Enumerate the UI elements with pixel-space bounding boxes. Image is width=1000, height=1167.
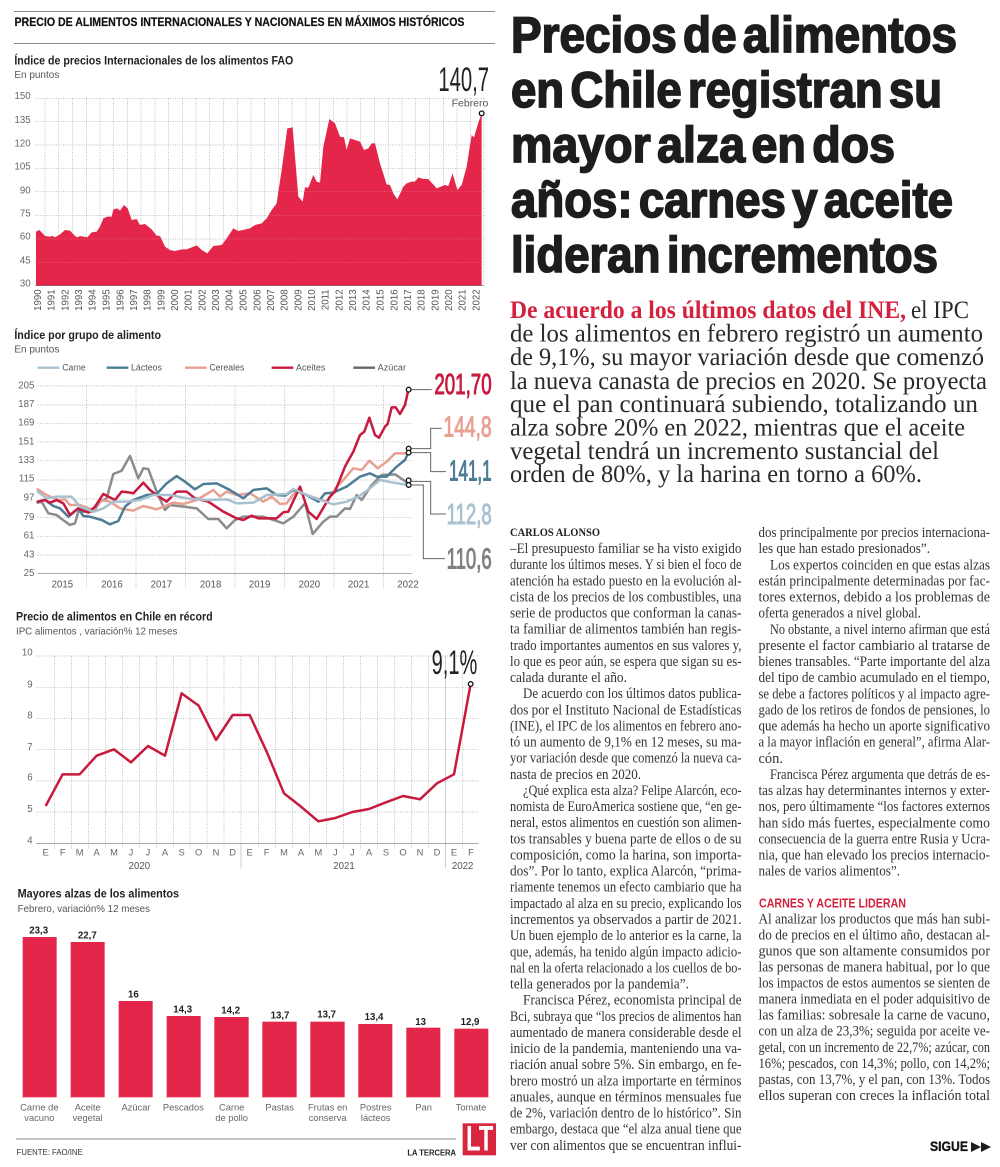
x axis year labels [33, 289, 482, 311]
article body: left column: composición, como la harina, son importa- [510, 848, 742, 864]
month labels: E [43, 848, 49, 858]
article body: final section: las familias: sobresale la carne de vacuno, [758, 1008, 990, 1024]
y axis labels: 105 [15, 161, 31, 172]
legend: Lácteos [131, 363, 162, 373]
chart unit: En puntos [14, 70, 59, 81]
article body: final section [758, 911, 991, 1104]
end values [434, 369, 492, 575]
y axis labels: 6 [27, 773, 33, 784]
legend: Aceites [296, 363, 326, 373]
article body: left column: De acuerdo con los últimos datos publica- [523, 686, 742, 702]
y axis labels: 8 [27, 710, 33, 721]
month labels: N [213, 848, 219, 858]
line: IPC alimentos [46, 684, 471, 821]
y axis labels: 43 [24, 549, 34, 560]
legend: Azúcar [378, 363, 406, 373]
x axis year labels: 2016 [101, 580, 123, 591]
month labels: M [280, 848, 288, 858]
bar category labels: Carne [219, 1102, 244, 1112]
y axis labels: 115 [19, 474, 34, 485]
y axis labels: 150 [15, 91, 31, 102]
x axis year labels: 2004 [225, 289, 236, 311]
y axis labels: 10 [22, 648, 33, 659]
article body: right column: cón. [758, 751, 783, 767]
x axis year labels: 1996 [115, 289, 126, 311]
bars [23, 937, 488, 1097]
deck paragraph: de 9,1%, su mayor variación desde que comenzó [510, 344, 984, 371]
article body: right column: nales de varios alimentos”. [758, 864, 900, 880]
x axis year labels: 1994 [88, 289, 99, 311]
x axis year labels: 2013 [348, 289, 359, 311]
logo: LT: LT [466, 1120, 493, 1159]
month labels: A [366, 848, 373, 858]
end values: 201,70 [434, 369, 492, 401]
line series [38, 390, 408, 534]
x axis year labels: 2017 [403, 289, 414, 311]
end values: 110,6 [447, 543, 492, 575]
leader lines to end values [412, 390, 446, 559]
logo: LT [463, 1120, 496, 1159]
article body: right column: presente el factor cambiario al tratarse de [758, 638, 990, 654]
article body: final section: gunos que son altamente consumidos por [758, 943, 990, 959]
continuation marker: SIGUE [930, 1139, 991, 1154]
bar category labels: Tomate [456, 1102, 486, 1112]
y axis labels: 7 [27, 742, 33, 753]
x axis year labels: 2009 [293, 289, 304, 311]
x axis year labels: 2012 [334, 289, 345, 311]
end values: 112,8 [447, 499, 492, 531]
callout: 9,1% [432, 644, 477, 686]
article body: right column [758, 525, 990, 880]
article body: final section: ellos superan con creces la inflación total [758, 1088, 990, 1104]
line: cereales [38, 453, 408, 511]
deck paragraph: vegetal tendrá un incremento sustancial del [510, 438, 939, 465]
deck paragraph: De acuerdo a los últimos datos del INE, [510, 297, 906, 324]
chart title: Precio de alimentos en Chile en récord [16, 611, 213, 624]
x axis year labels: 2015 [52, 580, 73, 591]
bar category labels [20, 1102, 486, 1123]
bar values: 23,3 [29, 925, 49, 936]
article body: left column: atención ha estado puesto en la evolución al- [510, 573, 742, 589]
callout: 140,7 February [438, 61, 489, 116]
x axis year labels: 2006 [252, 289, 263, 311]
callout: 140,7 February: 140,7 [438, 61, 489, 99]
x axis year labels: 2014 [362, 289, 373, 311]
y axis labels: 120 [15, 138, 31, 149]
article body: left column: –El presupuesto familiar se ha visto exigido [509, 541, 742, 557]
month labels: J [350, 848, 355, 858]
bar category labels: Carne de [20, 1102, 59, 1112]
deck paragraph: que el pan continuará subiendo, totalizando un [510, 391, 978, 418]
month labels: D [229, 848, 236, 858]
article body: left column: ¿Qué explica esta alza? Felipe Alarcón, eco- [523, 783, 742, 799]
article body: left column: serie de productos que conforman la canas- [510, 606, 742, 622]
panel: FAO food price index area chart [14, 55, 489, 311]
bar values: 12,9 [461, 1017, 480, 1028]
article body: left column: embargo, destaca que “el alza anual tiene que [510, 1122, 742, 1138]
article body: left column: riamente tenemos un efecto cambiario que ha [510, 880, 742, 896]
headline: en Chile registran su [511, 62, 942, 118]
x axis year labels: 2011 [321, 289, 332, 310]
bar category labels: lácteos [361, 1113, 391, 1123]
x axis year labels: 2021 [458, 289, 469, 311]
brand name: LA TERCERA [407, 1148, 456, 1157]
article body: left column: dos por el Instituto Nacional de Estadísticas [510, 702, 742, 718]
article body: left column: tó un aumento de 9,1% en 12 meses, su ma- [510, 735, 742, 751]
y axis labels: 60 [20, 231, 31, 242]
month labels: J [129, 848, 133, 858]
y axis labels: 75 [20, 209, 31, 220]
x axis year labels: 2017 [151, 580, 172, 591]
x axis year labels: 2008 [280, 289, 291, 311]
month labels: O [195, 848, 202, 858]
y axis labels: 79 [24, 512, 34, 523]
article body: left column: (INE), el IPC de los alimentos en febrero ano- [510, 718, 742, 734]
x axis year labels: 2015 [376, 289, 387, 311]
callout: 9,1%: 9,1% [432, 644, 477, 682]
article body: left column: anuales, aunque en términos mensuales fue [510, 1089, 742, 1105]
article body: left column: yor variación desde que comenzó la nueva ca- [510, 751, 742, 767]
x axis year labels: 2002 [197, 289, 208, 311]
continuation marker: SIGUE: SIGUE [930, 1139, 968, 1154]
bar values: 14,3 [173, 1004, 193, 1015]
y axis labels: 187 [18, 399, 34, 410]
x axis year labels: 2019 [249, 580, 270, 591]
x axis year labels: 2021 [348, 580, 369, 591]
x axis year labels: 2003 [211, 289, 222, 311]
month labels: E [247, 848, 253, 858]
y axis labels: 5 [27, 804, 33, 815]
year labels: 2021 [333, 861, 355, 872]
article body: right column: oferta generados a nivel global. [758, 606, 921, 622]
month labels: M [314, 848, 322, 858]
y axis labels [22, 648, 33, 846]
article body: left column: nomista de EuroAmerica sostiene que, “en ge- [510, 799, 742, 815]
end markers [406, 387, 411, 487]
article body: left column: calada durante el año. [510, 670, 627, 686]
x axis year labels: 2020 [444, 289, 455, 311]
x axis year labels: 2018 [417, 289, 428, 311]
x axis year labels: 1995 [102, 289, 113, 311]
bar values: 14,2 [221, 1006, 240, 1017]
headline [511, 7, 957, 283]
bar values: 13,7 [317, 1009, 336, 1020]
bar category labels: vegetal [73, 1113, 103, 1123]
y axis labels: 4 [27, 835, 33, 846]
bar category labels: Azúcar [121, 1102, 151, 1112]
article body: left column: brero mostró un alza importarte en términos [510, 1073, 742, 1089]
x axis year labels: 1992 [60, 289, 71, 311]
bar values: 13,4 [365, 1012, 384, 1023]
month labels: J [333, 848, 338, 858]
x axis year labels: 2019 [430, 289, 441, 311]
chart title: Índice de precios Internacionales de los alimentos FAO [14, 55, 293, 68]
chart unit: Febrero, variación% 12 meses [18, 904, 150, 915]
month labels: S [179, 848, 185, 858]
y axis labels: 97 [24, 493, 34, 504]
legend [38, 363, 406, 373]
year labels [129, 861, 473, 872]
x axis year labels: 1991 [47, 289, 58, 311]
line: carne [38, 480, 408, 512]
deck paragraph: de los alimentos en febrero registró un aumento [510, 320, 983, 348]
panel: Chile food CPI line chart [16, 611, 478, 872]
x axis year labels: 1997 [129, 289, 140, 311]
article body: left column: cista de los precios de los combustibles, una [510, 589, 742, 605]
x axis year labels: 2007 [266, 289, 277, 311]
x axis year labels: 2020 [299, 580, 320, 591]
x axis year labels: 2005 [239, 289, 250, 311]
month labels: D [434, 848, 441, 858]
x axis year labels: 2000 [170, 289, 181, 311]
year labels: 2022 [452, 861, 473, 872]
month labels: E [451, 848, 457, 858]
article body: left column [509, 541, 742, 1154]
source line: FUENTE: FAO/INE [17, 1148, 83, 1157]
bar category labels: de pollo [215, 1113, 248, 1123]
x axis year labels: 2001 [184, 289, 195, 311]
x axis year labels: 1993 [74, 289, 85, 311]
article body: left column: Francisca Pérez, economista principal de [523, 993, 742, 1009]
chart unit: En puntos [14, 344, 59, 355]
article body: left column: que, además, ha tenido algún impacto adicio- [510, 944, 742, 960]
line: lácteos [38, 453, 408, 524]
x axis year labels: 2010 [307, 289, 318, 311]
bar category labels: Frutas en [308, 1102, 347, 1112]
article body: left column: neral, estos alimentos en cuestión son alimen- [510, 815, 742, 831]
y axis labels: 133 [18, 455, 34, 466]
article body: right column: les que han estado presionados”. [758, 541, 930, 557]
y axis labels: 151 [18, 436, 34, 447]
y axis labels: 61 [24, 530, 34, 541]
article body: left column: nal en la oferta relacionado a los cuellos de bo- [510, 960, 742, 976]
y axis labels: 90 [20, 185, 31, 196]
y axis labels: 205 [18, 380, 34, 391]
chart unit: IPC alimentos , variación% 12 meses [16, 626, 177, 637]
bar category labels: Pastas [265, 1102, 294, 1112]
article body: left column: Un buen ejemplo de lo anterior es la carne, la [510, 928, 742, 944]
article body: left column: impactado al alza en su precio, explicando los [510, 896, 742, 912]
x axis year labels: 1990 [33, 289, 44, 311]
month labels: A [298, 848, 305, 858]
article body: left column: dos”. Por lo tanto, explica Alarcón, “prima- [510, 864, 742, 880]
month labels: M [110, 848, 118, 858]
y axis labels: 45 [20, 255, 31, 266]
deck paragraph: el IPC [911, 297, 969, 324]
panel: largest food increases bar chart [18, 888, 488, 1123]
article body: left column: nasta de precios en 2020. [510, 767, 641, 783]
month labels: F [60, 848, 66, 858]
bar category labels: conserva [309, 1113, 347, 1123]
byline: CARLOS ALONSO [510, 525, 600, 539]
month labels: A [94, 848, 101, 858]
line: azúcar [38, 456, 408, 534]
chart title: Mayores alzas de los alimentos [18, 888, 179, 901]
article body: left column: aumentado de manera considerable desde el [510, 1025, 742, 1041]
x axis year labels: 2016 [389, 289, 400, 311]
panel: index by food group line chart [14, 329, 492, 591]
month labels: A [162, 848, 169, 858]
end values: 144,8 [443, 412, 492, 444]
x axis year labels: 2022 [471, 289, 482, 311]
y axis labels [15, 91, 31, 289]
article body: left column: riación anual sobre 5%. Sin embargo, en fe- [510, 1057, 742, 1073]
headline: años: carnes y aceite [511, 172, 953, 228]
bar category labels: vacuno [24, 1113, 54, 1123]
bar category labels: Pescados [163, 1102, 204, 1112]
legend: Cereales [209, 363, 245, 373]
subheading: Carnes y aceite lideran: CARNES Y ACEITE LIDERAN [759, 897, 906, 911]
article body: right column: han sido más fuertes, especialmente como [758, 815, 990, 831]
article body: left column: ver con alimentos que se encuentran influi- [510, 1138, 742, 1154]
bar category labels: Pan [415, 1102, 432, 1112]
y axis labels: 9 [27, 680, 33, 691]
callout: 140,7 February: Febrero [452, 99, 488, 110]
article body: left column: tos transables y buena parte de ellos o de su [510, 831, 742, 847]
article body: left column: durante los últimos meses. Y si bien el foco de [510, 557, 742, 573]
section header: left column: PRECIO DE ALIMENTOS INTERNACIONALES Y NACIONALES EN MÁXIMOS HISTÓRICOS [14, 16, 465, 29]
article body: left column: incrementos ya observados a partir de 2021. [510, 912, 742, 928]
bar values [29, 925, 480, 1028]
area: FAO index series [36, 113, 482, 286]
headline: lideran incrementos [511, 227, 938, 283]
legend: Carne [62, 363, 86, 373]
end values: 141,1 [449, 456, 492, 488]
x axis year labels: 1998 [143, 289, 154, 311]
article body: right column: tores externos, debido a los problemas de [758, 590, 990, 606]
deck paragraph: orden de 80%, y la harina en torno a 60%. [510, 461, 922, 488]
month labels: O [399, 848, 407, 858]
article body: left column: trado importantes aumentos en sus valores y, [510, 638, 742, 654]
x axis year labels: 2018 [200, 580, 221, 591]
month labels: F [468, 848, 474, 858]
chart title: Índice por grupo de alimento [14, 329, 161, 342]
article body: left column: inicio de la pandemia, manteniendo una va- [510, 1041, 742, 1057]
bar category labels: Postres [360, 1102, 392, 1112]
deck paragraph [510, 297, 987, 488]
year labels: 2020 [129, 861, 150, 872]
line: aceites [38, 390, 408, 520]
article body: left column: tella generados por la pandemia”. [510, 976, 689, 992]
month labels: M [76, 848, 84, 858]
month labels: F [264, 848, 270, 858]
x axis year labels: 2022 [397, 580, 419, 591]
footer: source and brand [16, 1120, 496, 1159]
article body: left column: ta familiar de alimentos también han regis- [510, 622, 742, 638]
bar values: 13 [415, 1017, 427, 1028]
bar values: 22,7 [78, 931, 97, 942]
headline: Precios de alimentos [511, 7, 957, 63]
headline: mayor alza en dos [511, 117, 895, 173]
bar values: 13,7 [271, 1010, 289, 1021]
y axis labels: 30 [20, 278, 31, 289]
y axis labels [18, 380, 34, 579]
deck paragraph: alza sobre 20% en 2022, mientras que el aceite [510, 414, 965, 442]
month labels: N [417, 848, 423, 858]
bar values: 16 [128, 990, 139, 1001]
article body: left column: lo que es peor aún, se espera que sigan su es- [510, 654, 742, 670]
y axis labels: 25 [24, 568, 34, 579]
month labels: J [146, 848, 150, 858]
y axis labels: 135 [15, 115, 31, 126]
article body: left column: de 2%, variación dentro de lo histórico”. Sin [510, 1106, 742, 1122]
article body: left column: Bci, subraya que “los precios de alimentos han [510, 1009, 742, 1025]
deck paragraph: la nueva canasta de precios en 2020. Se proyecta [510, 368, 987, 395]
y axis labels: 169 [18, 418, 34, 429]
x axis year labels [52, 580, 419, 591]
month labels [43, 848, 474, 858]
x axis year labels: 1999 [156, 289, 167, 311]
bar category labels: Aceite [75, 1102, 101, 1112]
month labels: S [383, 848, 389, 858]
